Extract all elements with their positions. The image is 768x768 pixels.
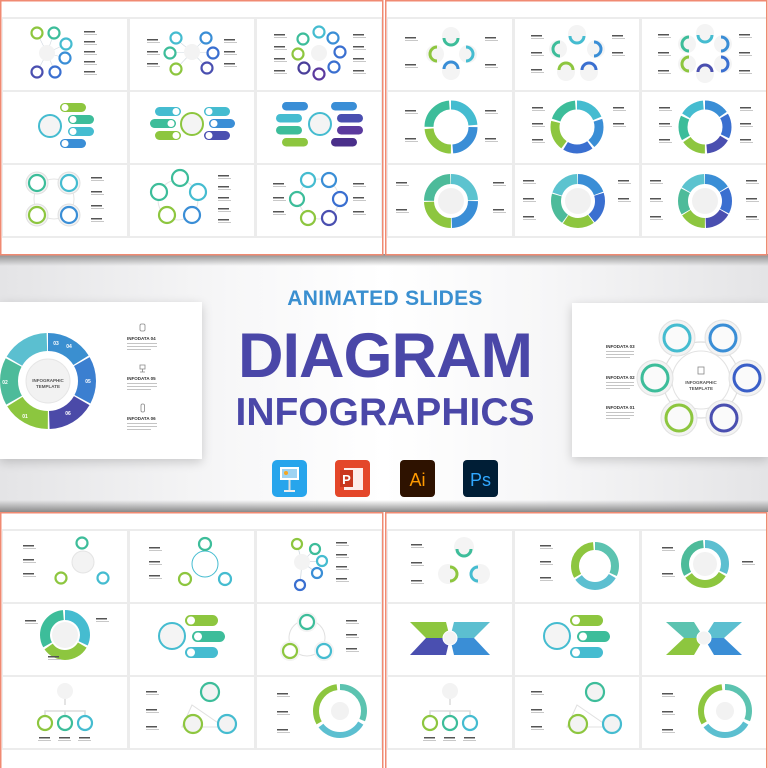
title block [235,287,534,434]
text blocks: INFODATA 03 [606,344,635,349]
middle band background [0,256,768,512]
text blocks: INFODATA 01 [606,405,635,410]
slide: 6-segment puzzle donut [650,179,759,223]
slide: 3 ring triangle [280,612,359,661]
panel: top-right slide grid [385,0,768,256]
slide: 4 ring flower [26,172,104,226]
slide: circle with 4 pills [39,103,94,148]
heading: INFOGRAPHICS: INFOGRAPHICS [235,391,534,434]
slide: 5 ring flower [151,170,231,223]
card: left 6-segment donut slide: 06 [65,411,71,417]
slide: small X shape [666,622,742,655]
card: left 6-segment donut slide: 04 [66,344,72,350]
panel: bottom-right slide grid [385,512,768,768]
slide: 3 ring cycle [146,683,236,733]
slide: 3 segment thin donut [277,687,364,735]
card: left 6-segment donut slide: INFOGRAPHIC [32,378,65,383]
card: left 6-segment donut slide: TEMPLATE [36,384,60,389]
slide: tree with 3 nodes [38,683,92,741]
icon: illustrator: Ai [409,470,426,490]
slide: circle with 6 pills [150,107,235,140]
card: right 6-node ring slide: TEMPLATE [689,386,713,391]
slide: hub with 6 nodes, text both sides [147,32,237,74]
card: right 6-node ring slide [572,303,768,457]
slide: 3 ring cycle [531,683,621,733]
heading: DIAGRAM: DIAGRAM [238,321,532,391]
slide: 6 ring flower [273,173,366,225]
card: left 6-segment donut slide: 02 [2,380,8,386]
slide: tree with 3 nodes [423,683,477,741]
slide: 6-segment donut [659,105,753,149]
text blocks: INFODATA 05 [127,376,156,381]
icon: illustrator [400,460,435,497]
slide: hub 5 nodes [292,539,349,590]
text blocks [127,336,156,421]
slide: 5 arc nodes [531,25,625,81]
slide: circle with 3 pills [544,615,610,658]
text blocks: INFODATA 04 [127,336,156,341]
slide: hub with 6 nodes [32,28,97,78]
slide: 6 arc nodes [658,24,752,83]
card: right 6-node ring slide: INFOGRAPHIC [685,380,718,385]
chart: 6 segment donut [9,342,87,420]
icon: powerpoint: P [342,472,351,487]
chart: ring of nodes [663,342,739,418]
icon: powerpoint [335,460,370,497]
slide: hub with 8 nodes [274,26,366,80]
slide: 3 pin cycle [149,538,231,585]
slide: 3 arc nodes [411,537,490,584]
slide: 3 node hub [23,538,108,584]
shadow under top panels [0,254,768,266]
text blocks: INFODATA 06 [127,416,156,421]
card: left 6-segment donut slide [0,302,202,459]
slide: 4-segment donut [405,105,498,149]
slide: 4 arc nodes [405,27,498,80]
icons row [272,460,498,497]
slide: circle with 8 pills [276,102,363,146]
panel: bottom-left slide grid [0,512,384,768]
slide: 4 part X shape [410,622,490,655]
slide: 3 segment puzzle donut [662,544,755,584]
icon: photoshop [463,460,498,497]
shadow above bottom panels [0,500,768,512]
subtitle: ANIMATED SLIDES [287,287,483,310]
card: left 6-segment donut slide: 03 [53,341,59,347]
slide: 3 segment donut [25,615,109,660]
slide: 5-segment donut [532,105,626,149]
slide: 3 segment thin donut [662,687,749,735]
card: left 6-segment donut slide: 05 [85,379,91,385]
slide: 4-segment puzzle donut [396,179,506,223]
slide: 5-segment puzzle donut [523,179,631,223]
card: left 6-segment donut slide: 01 [22,414,28,420]
text blocks: INFODATA 02 [606,375,635,380]
icon: keynote [272,460,307,497]
text blocks [606,344,635,410]
icon: photoshop: Ps [470,470,491,490]
panel: top-left slide grid [0,0,384,256]
slide: 3 segment donut [540,545,615,586]
slide: circle with 3 pills [159,615,225,658]
